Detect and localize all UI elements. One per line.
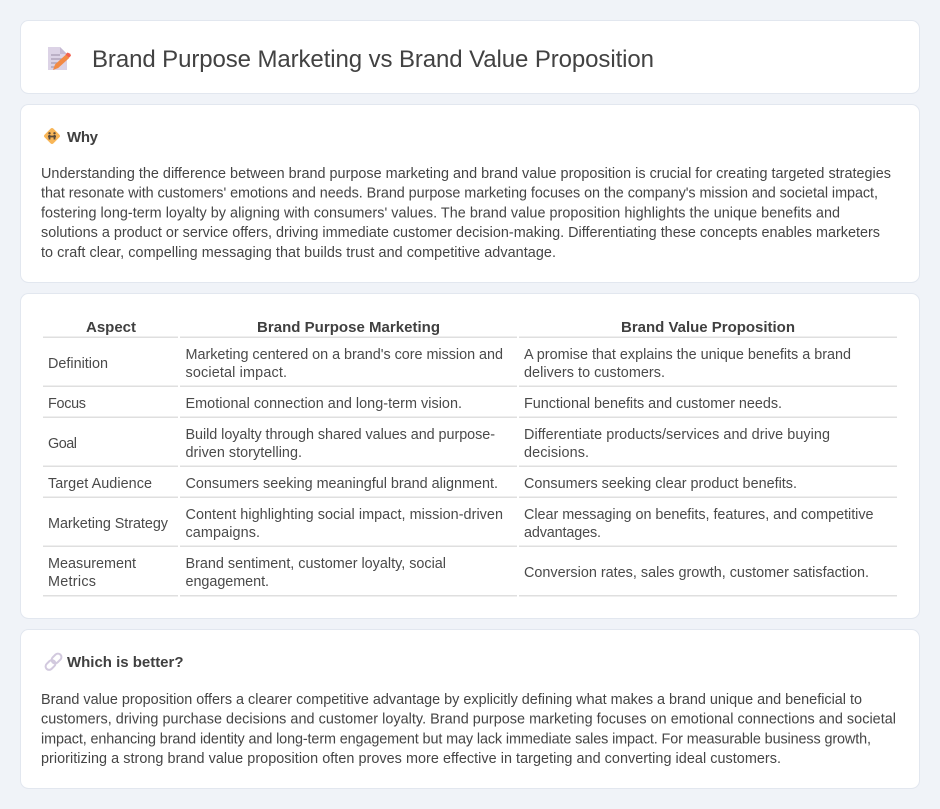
row: target audience: Target Audience [48,476,152,492]
table header row: Aspect [86,319,136,336]
row: marketing strategy: Clear messaging on benefits, features, and competitive [524,507,874,523]
row: marketing strategy: campaigns. [186,525,260,541]
row: marketing strategy: advantages. [524,525,601,541]
row: definition: societal impact. [186,365,287,381]
row: target audience [48,476,797,492]
panel: header [20,20,920,94]
row: target audience: Consumers seeking meaningful brand alignment. [186,476,498,492]
text block: which is better paragraph: customers, driving purchase decisions and customer loyalty. Brand purpose marketing focuses on emotional connections and societal [41,712,896,728]
table header row: Brand Purpose Marketing [257,319,440,336]
row: focus [48,396,782,412]
row: marketing strategy [48,507,874,541]
row: measurement metrics [48,556,869,590]
text block: why paragraph: solutions a product or service offers, driving immediate customer decision-making. Differentiating these concepts enables marketers [41,225,880,241]
row: target audience: Consumers seeking clear product benefits. [524,476,797,492]
row: goal [48,427,830,461]
table header row [86,319,795,336]
title: Brand Purpose Marketing vs Brand Value Proposition [92,46,654,73]
row: definition [48,347,851,381]
panel: comparison table [20,294,920,618]
text block: why paragraph: that resonate with customers' emotions and needs. Brand purpose marketing focuses on the company's mission and societal impact, [41,186,878,202]
row: focus: Emotional connection and long-term vision. [186,396,462,412]
text block: which is better paragraph: prioritizing a strong brand value proposition often proves more effective in targeting and converting ideal customers. [41,751,781,767]
text block: which is better paragraph [41,692,896,767]
row: focus: Functional benefits and customer needs. [524,396,782,412]
text block: why paragraph: Understanding the difference between brand purpose marketing and brand value proposition is crucial for creating targeted strategies [41,166,891,182]
heading: why: Why [67,129,99,146]
icon: warning diamond [43,127,61,145]
icon: link [44,652,63,671]
table header row: Brand Value Proposition [621,319,795,336]
row: marketing strategy: Content highlighting social impact, mission-driven [186,507,503,523]
row: definition: Marketing centered on a brand's core mission and [186,347,503,363]
text block: which is better paragraph: Brand value proposition offers a clearer competitive advantage by explicitly defining what makes a brand unique and beneficial to [41,692,862,708]
row: definition: Definition [48,356,108,372]
text block: which is better paragraph: impact, enhancing brand identity and long-term engagement but may lack immediate sales impact. For measurable business growth, [41,731,871,747]
row: measurement metrics: Metrics [48,574,96,590]
text block: why paragraph: fostering long-term loyalty by aligning with consumers' values. The brand value proposition highlights the unique benefits and [41,205,840,221]
row: marketing strategy: Marketing Strategy [48,516,169,532]
row: definition: A promise that explains the unique benefits a brand [524,347,851,363]
row: measurement metrics: Conversion rates, sales growth, customer satisfaction. [524,565,869,581]
row: definition: delivers to customers. [524,365,665,381]
text block: why paragraph [41,166,891,261]
text block: why paragraph: to craft clear, compelling messaging that builds trust and competitive advantage. [41,245,556,261]
row: goal: Goal [48,436,77,452]
panel: which is better [20,630,920,788]
row: goal: driven storytelling. [186,445,302,461]
row: measurement metrics: Brand sentiment, customer loyalty, social [186,556,446,572]
row: measurement metrics: engagement. [186,574,269,590]
heading: which is better: Which is better? [67,654,184,671]
row: goal: Differentiate products/services and drive buying [524,427,830,443]
row: measurement metrics: Measurement [48,556,136,572]
row: focus: Focus [48,396,86,412]
row: goal: Build loyalty through shared values and purpose- [186,427,495,443]
panel: why [20,104,920,282]
icon: document with pencil [48,47,71,70]
row: goal: decisions. [524,445,589,461]
